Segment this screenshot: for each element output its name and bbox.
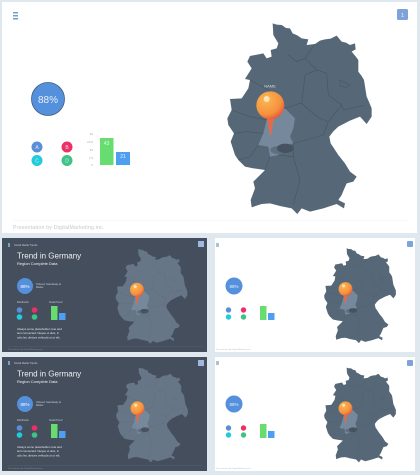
slide: white thumbnail top: [215, 238, 415, 352]
bars: [49, 419, 66, 438]
bar chart: 30: [90, 132, 93, 136]
body text: odio leo ultrices vehicula ut ut elit.: [17, 454, 60, 458]
legend: [17, 301, 37, 320]
heading: Trend in Germany: [17, 370, 81, 378]
map: Germany on dark: [116, 368, 188, 462]
stat circle: [226, 278, 242, 294]
bars: [260, 424, 274, 438]
map: Germany: [324, 368, 396, 462]
bar chart: 21: [120, 154, 126, 160]
top label: Social Media Trends: [14, 243, 38, 247]
legend icons: B: [65, 145, 69, 151]
heading: [17, 252, 81, 266]
map: Germany: NAME: [264, 83, 276, 88]
legend: [17, 419, 37, 438]
icon: page badge: [397, 9, 408, 20]
heading: Trend in Germany: [17, 252, 81, 260]
body text: [17, 327, 62, 340]
footer: Presentation by DigitalMarketing.inc.: [216, 348, 252, 351]
small menu and badge: [216, 360, 413, 366]
top label: [8, 241, 204, 247]
footer rule and caption: Presentation by DigitalMarketing.inc.: [13, 225, 105, 231]
legend icons: C: [35, 158, 39, 164]
footer: Presentation by DigitalMarketing.inc.: [8, 348, 44, 351]
bar chart: 0: [91, 163, 93, 167]
slide: dark thumbnail top: [2, 238, 207, 352]
stat circle: Ordered: Seamlessly at: [36, 401, 61, 404]
heading: Region Complete Data: [17, 379, 58, 384]
map: Germany on dark: [116, 249, 187, 344]
map: Germany: [227, 23, 372, 214]
body text: text connected. Neque ut duis, in: [17, 449, 59, 453]
body text: odio leo ultrices vehicula ut ut elit.: [17, 336, 60, 340]
stat circle: [17, 396, 61, 412]
bars: [49, 301, 66, 320]
stat circle: [226, 396, 242, 412]
icon: page badge: 1: [401, 13, 404, 19]
legend dots: [226, 307, 246, 320]
top label: [8, 360, 204, 366]
body text: Always some placeholder note and: [17, 327, 62, 331]
body text: [17, 445, 62, 458]
small menu and badge: [216, 241, 413, 247]
stat circle: [17, 278, 61, 294]
legend icons: [32, 142, 72, 166]
stat circle: Market: [36, 286, 44, 289]
body text: Always some placeholder note and: [17, 445, 62, 449]
top label: Social Media Trends: [14, 361, 38, 365]
bar chart: 22.5: [87, 140, 93, 144]
stat circle: 88%: [229, 284, 239, 289]
bar chart: [87, 132, 130, 167]
legend: Distribution: [17, 419, 30, 422]
stat circle: Ordered: Seamlessly at: [36, 283, 61, 286]
legend: Distribution: [17, 301, 30, 304]
stat circle: 88%: [20, 402, 30, 407]
bars: Social Trend: [49, 419, 63, 422]
icon: menu: [13, 12, 18, 20]
bar chart: 43: [104, 141, 109, 147]
bar chart: 7.5: [89, 156, 93, 160]
slide: large white map slide: [2, 2, 417, 233]
heading: [17, 370, 81, 384]
footer: Presentation by DigitalMarketing.inc.: [8, 467, 44, 470]
slide: white thumbnail bottom: [215, 357, 415, 471]
stat circle: 88%: [229, 402, 239, 407]
footer: Presentation by DigitalMarketing.inc.: [216, 467, 252, 470]
percentage circle: 88%: [38, 95, 58, 106]
stat circle: 88%: [20, 284, 30, 289]
bar chart: 15: [90, 148, 93, 152]
percentage circle: [32, 82, 64, 116]
legend icons: D: [65, 158, 69, 164]
slide: dark thumbnail bottom: [2, 357, 207, 471]
legend dots: [226, 425, 246, 438]
bars: Social Trend: [49, 301, 63, 304]
legend icons: A: [35, 145, 39, 151]
body text: text connected. Neque ut duis, in: [17, 331, 59, 335]
stat circle: Market: [36, 404, 44, 407]
bars: [260, 306, 274, 320]
heading: Region Complete Data: [17, 261, 58, 266]
map: Germany: [324, 248, 396, 343]
